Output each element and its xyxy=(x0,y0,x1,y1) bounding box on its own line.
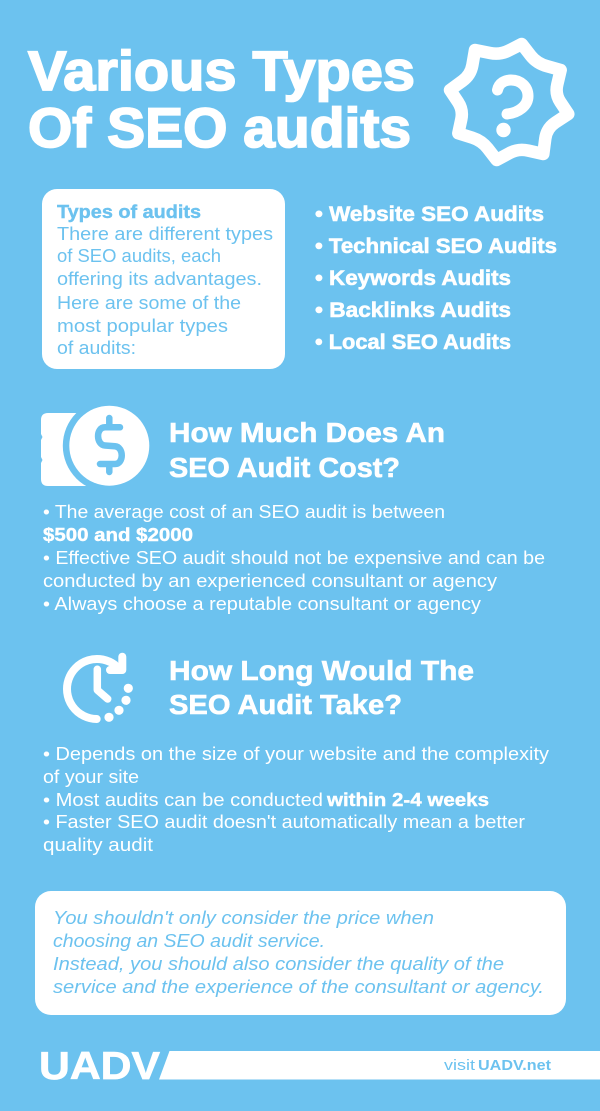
text block: cost details: conducted by an experienced consultant or agency xyxy=(43,570,498,591)
panel: types of audits intro xyxy=(42,189,285,369)
heading: audit cost xyxy=(169,417,445,483)
text block: duration details: within 2-4 weeks xyxy=(326,789,489,810)
footer: brand band: visit xyxy=(444,1057,476,1074)
text block: duration details: of your site xyxy=(43,766,139,787)
icon: clock with arrow xyxy=(67,657,133,722)
panel: types of audits intro: most popular types xyxy=(57,315,228,336)
panel: types of audits intro: of audits: xyxy=(57,337,136,358)
heading: audit duration xyxy=(169,655,474,720)
text block: cost details: • Always choose a reputable consultant or agency xyxy=(43,593,482,614)
footer: brand band: UADV.net xyxy=(478,1057,551,1074)
icon: question mark badge xyxy=(450,44,568,160)
panel: types of audits intro: offering its advantages. xyxy=(57,268,262,289)
text block: duration details xyxy=(43,743,550,855)
list: audit types: • Keywords Audits xyxy=(315,267,511,290)
title: Of SEO audits xyxy=(28,96,411,159)
list: audit types: • Technical SEO Audits xyxy=(315,235,557,258)
heading: audit cost: SEO Audit Cost? xyxy=(169,452,400,483)
callout: quality note: You shouldn't only consider the price when xyxy=(53,907,434,928)
text block: cost details xyxy=(43,501,545,614)
footer: brand band xyxy=(39,1045,600,1088)
panel: types of audits intro: There are different types xyxy=(57,223,273,244)
text block: cost details: • Effective SEO audit should not be expensive and can be xyxy=(43,547,545,568)
text block: duration details: • Most audits can be conducted xyxy=(43,789,323,810)
text block: duration details: • Faster SEO audit doesn't automatically mean a better xyxy=(43,811,525,832)
callout: quality note xyxy=(35,891,566,1015)
text block: duration details: • Depends on the size of your website and the complexity xyxy=(43,743,550,764)
list: audit types: • Website SEO Audits xyxy=(315,203,544,226)
list: audit types xyxy=(315,203,557,354)
callout: quality note: Instead, you should also consider the quality of the xyxy=(53,953,504,974)
text block: cost details: • The average cost of an SEO audit is between xyxy=(43,501,445,522)
callout: quality note: choosing an SEO audit service. xyxy=(53,930,325,951)
list: audit types: • Backlinks Audits xyxy=(315,299,511,322)
title xyxy=(28,39,415,159)
panel: types of audits intro: Here are some of the xyxy=(57,292,241,313)
heading: audit cost: How Much Does An xyxy=(169,417,445,448)
footer: brand band: UADV xyxy=(39,1045,160,1088)
list: audit types: • Local SEO Audits xyxy=(315,331,511,354)
heading: audit duration: How Long Would The xyxy=(169,655,474,686)
heading: audit duration: SEO Audit Take? xyxy=(169,689,402,720)
title: Various Types xyxy=(28,39,415,102)
panel: types of audits intro: Types of audits xyxy=(57,201,201,222)
text block: cost details: $500 and $2000 xyxy=(43,524,193,545)
text block: duration details: quality audit xyxy=(43,834,153,855)
panel: types of audits intro: of SEO audits, each xyxy=(57,245,221,266)
callout: quality note: service and the experience of the consultant or agency. xyxy=(53,976,544,997)
icon: dollar coins xyxy=(41,399,156,492)
